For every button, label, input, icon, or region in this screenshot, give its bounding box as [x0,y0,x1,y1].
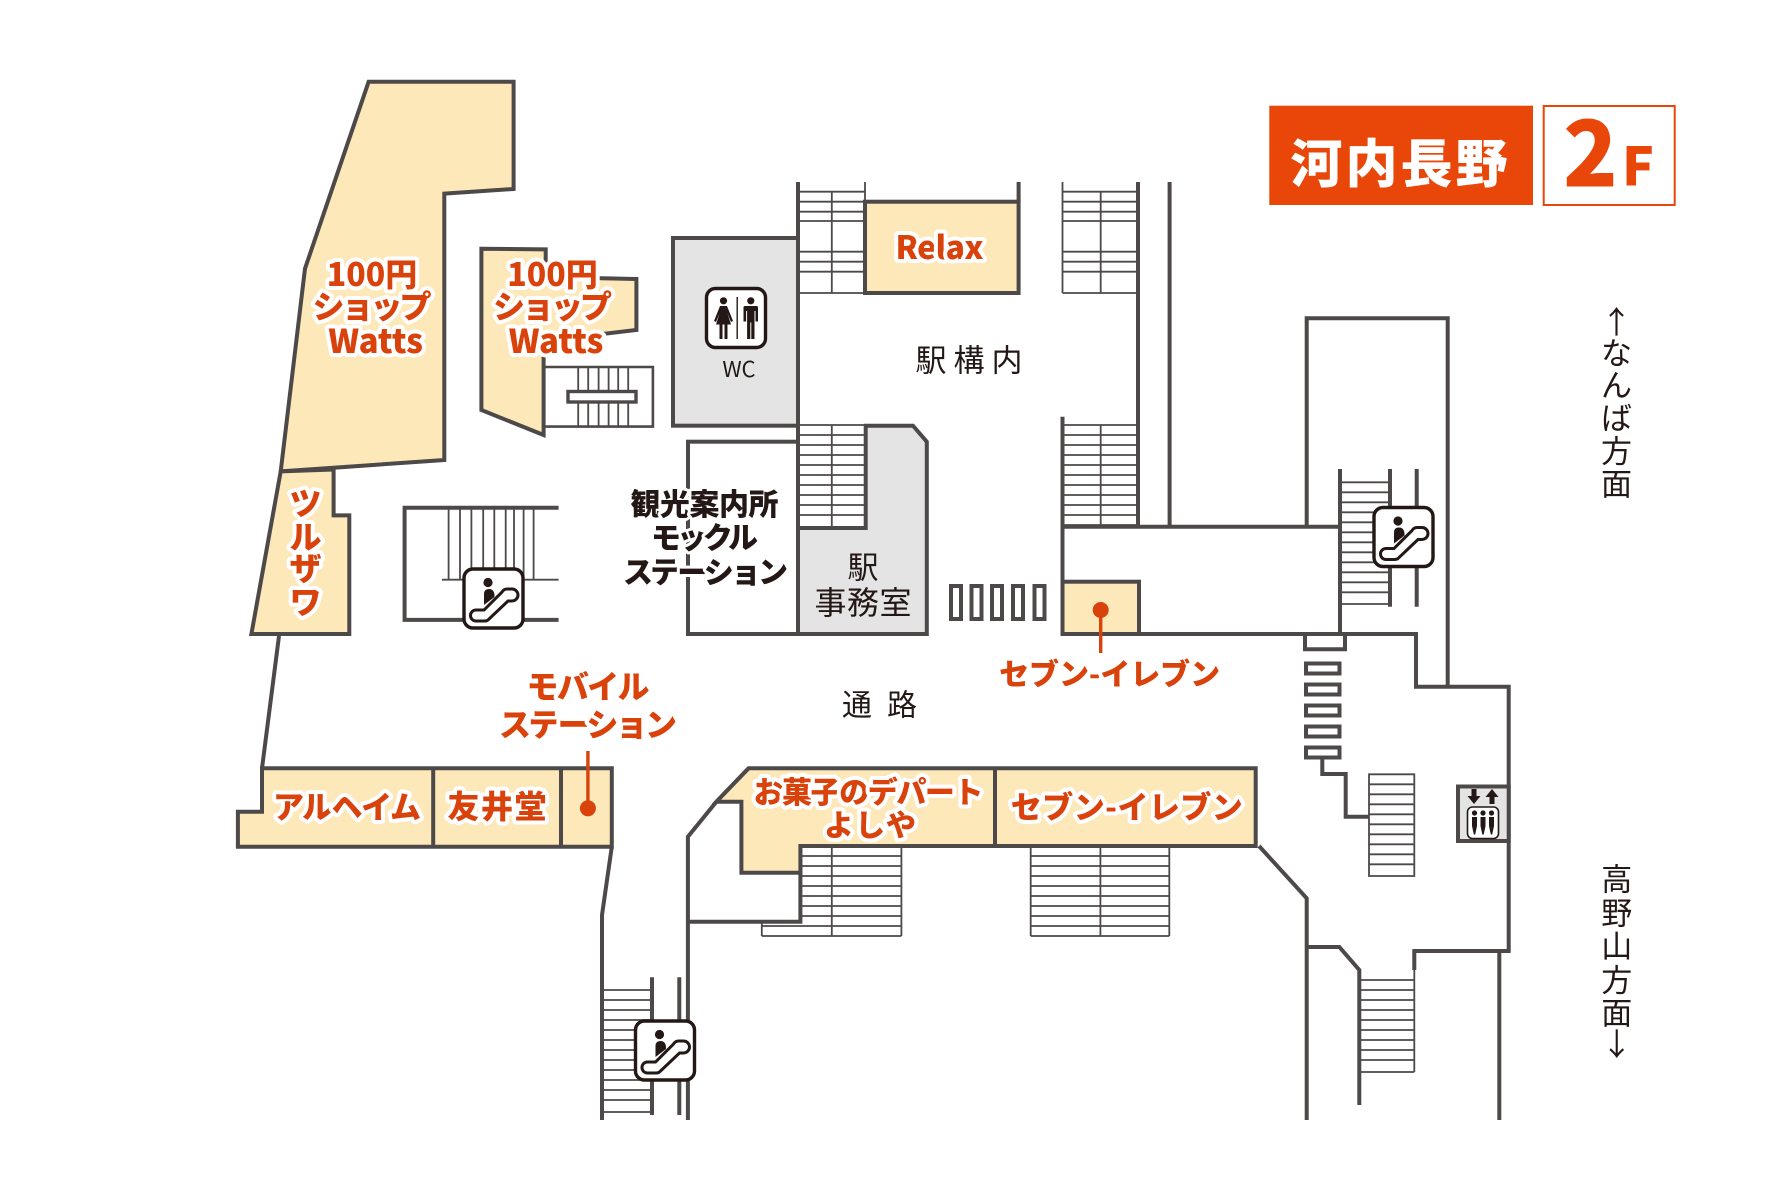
direction: 高野山方面: 方 [1601,956,1632,1000]
direction: なんば方面: ん [1601,360,1632,406]
label: お菓子のデパートよしや: よしや [824,801,916,845]
label: アルヘイム: アルヘイム [273,782,421,828]
direction: 高野山方面: 山 [1601,922,1632,966]
label: モバイルステーション: モバイル [526,662,650,708]
label: モバイルステーション: ステーション [499,700,677,746]
icon: escalator north-east [1374,508,1433,566]
label: 通路: 通路 [842,680,917,724]
label: 100円ショップ Watts large: ショップ [312,282,432,328]
room: 観光案内所 [688,442,798,634]
label: セブン-イレブン large shop: セブン-イレブン [1011,782,1243,828]
stairs: north-east stair [1062,182,1138,293]
direction: なんば方面: ば [1601,394,1632,438]
floor plan walls and structure [262,182,1509,1120]
stairs: north-east escalator [1340,482,1390,604]
stairs: west stair with landing [544,367,653,427]
room: WC [673,238,798,426]
label: 100円ショップ Watts large: Watts [328,315,423,363]
direction: 高野山方面: ↓ [1601,1020,1632,1064]
floor badge: 2F [1544,82,1675,212]
icon: restroom [706,288,766,348]
label: 駅事務室 [814,542,912,624]
shop: 100円ショップ Watts large [281,82,514,471]
direction: なんば方面: 面 [1601,460,1632,504]
label: 観光案内所モックルステーション: ステーション [623,548,788,592]
direction: 高野山方面: 面 [1601,988,1632,1034]
walls [262,182,1509,1120]
label: 駅構内: 駅構内 [916,336,1022,380]
direction: なんば方面: な [1601,328,1632,374]
label: ツルザワ: ワ [289,578,322,624]
label: 駅事務室: 事務室 [814,578,912,624]
label: WC: WC [722,352,756,384]
label: お菓子のデパートよしや: お菓子のデパート [754,768,984,812]
label: Relax: Relax [896,223,984,269]
stairs: south-centre stair A [762,846,901,936]
direction: なんば方面: 方 [1601,426,1632,472]
label: 100円ショップ Watts small [493,250,612,363]
icon: escalator west [464,569,523,628]
shop: セブン-イレブン small [1062,582,1139,634]
title: 河内長野 [1269,106,1533,205]
stairs: east stair [1062,425,1138,526]
label: 駅事務室: 駅 [848,542,878,588]
direction: 高野山方面: 高 [1601,854,1632,900]
shop row: アルヘイム, 友井堂, モバイルステーション [238,768,612,847]
label: 観光案内所モックルステーション: 観光案内所 [630,480,778,524]
label: 友井堂: 友井堂 [448,782,546,828]
shop: Relax [865,202,1019,293]
direction: 高野山方面: 野 [1601,888,1632,934]
stairs: central stair beside office [798,425,865,528]
stairs: north-centre stair [798,182,865,293]
pointer: セブン-イレブン [1093,602,1109,653]
stairs: south-east stair upper [1369,774,1414,876]
label: 100円ショップ Watts small: 100円 [507,250,598,296]
stairs: south-west stair [602,990,652,1112]
icon: elevator [1468,789,1498,838]
floor badge: 2F: F [1622,126,1654,202]
stairs: south-centre stair B [1031,846,1169,936]
label: ツルザワ: ル [289,513,322,559]
label: 100円ショップ Watts small: Watts [509,315,603,363]
title: 河内長野: 河内長野 [1290,122,1508,198]
stairs: south-east stair lower [1359,970,1414,1072]
direction: 高野山方面 [1601,854,1632,1064]
pointer: モバイルステーション [580,751,596,816]
label: 100円ショップ Watts large [312,250,432,363]
label: 100円ショップ Watts small: ショップ [493,282,612,328]
shop: ツルザワ [251,470,349,634]
room: elevator [1458,786,1509,841]
label: ツルザワ: ザ [289,544,322,590]
room: 駅事務室 [798,426,927,634]
label: 観光案内所モックルステーション: モックル [651,514,758,558]
label: モバイルステーション [499,662,677,746]
floor badge: 2F: 2 [1563,82,1618,212]
label: 観光案内所モックルステーション [623,480,788,592]
label: お菓子のデパートよしや [754,768,984,845]
shop row: お菓子のデパート, セブン-イレブン [716,768,1256,873]
ticket gates east [1306,664,1340,758]
label: ツルザワ [289,479,322,624]
stairs: west escalator stair [405,508,559,620]
direction: なんば方面 [1601,298,1632,504]
label: ツルザワ: ツ [289,479,322,525]
shop: 100円ショップ Watts small [481,249,636,435]
icon: escalator south-west [636,1021,694,1080]
direction: なんば方面: ↑ [1601,298,1632,342]
label: 100円ショップ Watts large: 100円 [327,250,417,296]
ticket gates west [951,586,1044,619]
label: セブン-イレブン callout: セブン-イレブン [999,650,1220,694]
